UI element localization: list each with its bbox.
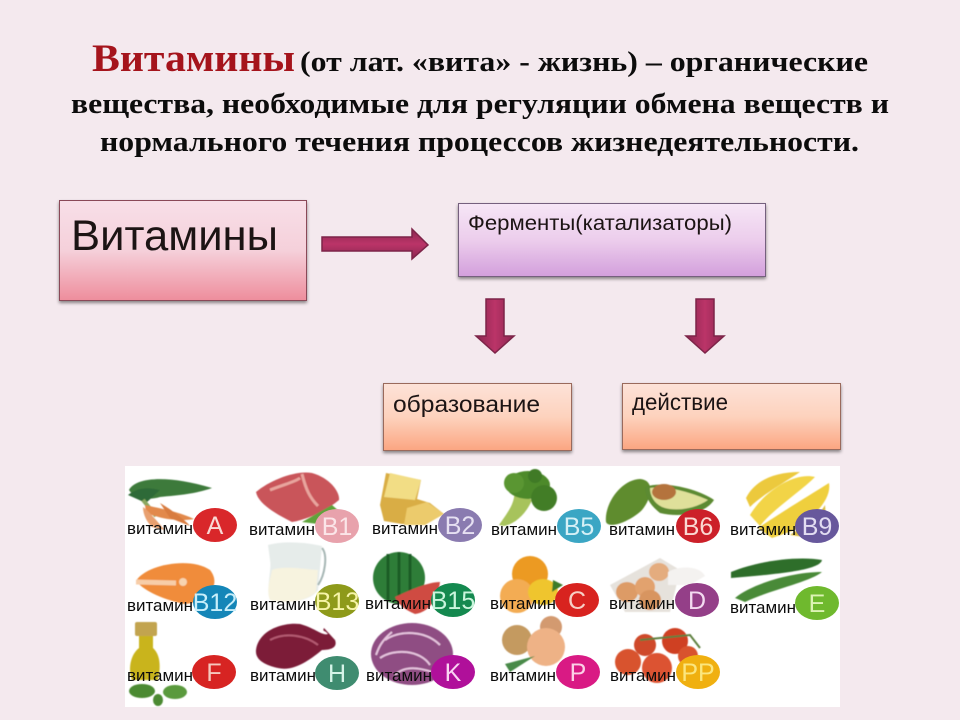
vitamin F: oil bottle and basil: витамин — [127, 666, 193, 685]
vitamin P: peaches: витамин — [490, 666, 556, 685]
arrow: down left — [476, 299, 514, 353]
vitamin B1: meat — [249, 472, 359, 543]
vitamin PP: tomatoes: PP — [681, 659, 715, 687]
vitamin PP: tomatoes — [610, 628, 720, 689]
vitamin B2: cheese: B2 — [445, 512, 475, 540]
vitamin D: eggs: витамин — [609, 594, 675, 613]
vitamin B9: bananas — [730, 472, 839, 543]
box: Ферменты: Ферменты(катализаторы) — [468, 212, 732, 235]
vitamin E: peas: витамин — [730, 598, 796, 617]
vitamin H: red onion — [250, 624, 359, 690]
vitamin K: red cabbage — [366, 623, 475, 689]
vitamin B6: avocado: витамин — [609, 520, 675, 539]
vitamin C: oranges: витамин — [490, 594, 556, 613]
vitamin B13: milk jug: B13 — [315, 588, 359, 616]
title line 1: Витамины — [92, 37, 295, 80]
vitamin B12: salmon: B12 — [193, 589, 237, 617]
vitamin E: peas — [730, 558, 839, 620]
vitamin D: eggs — [609, 558, 719, 617]
vitamin F: oil bottle and basil: F — [206, 659, 222, 687]
vitamin C: oranges — [490, 556, 599, 617]
vitamin P: peaches — [490, 616, 600, 689]
vitamin H: red onion: витамин — [250, 666, 316, 685]
vitamin B9: bananas: B9 — [802, 513, 832, 541]
vitamin D: eggs: D — [688, 587, 706, 615]
vitamin B5: broccoli: B5 — [564, 513, 594, 541]
vitamin A: carrots: A — [207, 512, 224, 540]
box: Витамины: Витамины — [71, 212, 278, 260]
title line 1: (от лат. «вита» - жизнь) – органические — [300, 46, 868, 78]
vitamin E: peas: E — [809, 590, 825, 618]
vitamin B12: salmon — [127, 563, 237, 619]
vitamin B12: salmon: витамин — [127, 596, 193, 615]
vitamin B5: broccoli: витамин — [491, 520, 557, 539]
vitamin F: oil bottle and basil — [127, 622, 236, 706]
box: Ферменты — [458, 204, 766, 276]
vitamin A: carrots — [127, 479, 237, 542]
box: образование — [384, 384, 572, 450]
vitamin B2: cheese — [372, 473, 482, 542]
vitamin B9: bananas: витамин — [730, 520, 796, 539]
panel: vitamin foods — [125, 466, 840, 707]
arrow: to enzymes — [322, 229, 428, 259]
vitamin B13: milk jug: витамин — [250, 595, 316, 614]
box: действие: действие — [632, 389, 728, 415]
title — [71, 37, 889, 158]
arrow: down right — [686, 299, 724, 353]
title line 2: вещества, необходимые для регуляции обмена веществ и — [71, 88, 889, 120]
box: действие — [622, 384, 840, 450]
title line 3: нормального течения процессов жизнедеятельности. — [100, 126, 859, 158]
vitamin H: red onion: H — [328, 660, 346, 688]
vitamin B5: broccoli — [491, 469, 601, 543]
vitamin B15: watermelon: витамин — [365, 594, 431, 613]
vitamin B1: meat: витамин — [249, 520, 315, 539]
vitamin B15: watermelon: B15 — [431, 587, 475, 615]
vitamin A: carrots: витамин — [127, 519, 193, 538]
vitamin B15: watermelon — [365, 552, 475, 617]
vitamin K: red cabbage: витамин — [366, 666, 432, 685]
vitamin B13: milk jug — [250, 542, 359, 618]
box: Витамины — [60, 200, 306, 300]
vitamin B1: meat: B1 — [322, 513, 352, 541]
box: образование: образование — [393, 391, 540, 417]
vitamin K: red cabbage: K — [445, 659, 462, 687]
vitamin B2: cheese: витамин — [372, 519, 438, 538]
vitamin B6: avocado: B6 — [683, 513, 713, 541]
vitamin P: peaches: P — [570, 659, 586, 687]
vitamin PP: tomatoes: витамин — [610, 666, 676, 685]
vitamin B6: avocado — [606, 479, 720, 543]
vitamin C: oranges: C — [568, 587, 586, 615]
